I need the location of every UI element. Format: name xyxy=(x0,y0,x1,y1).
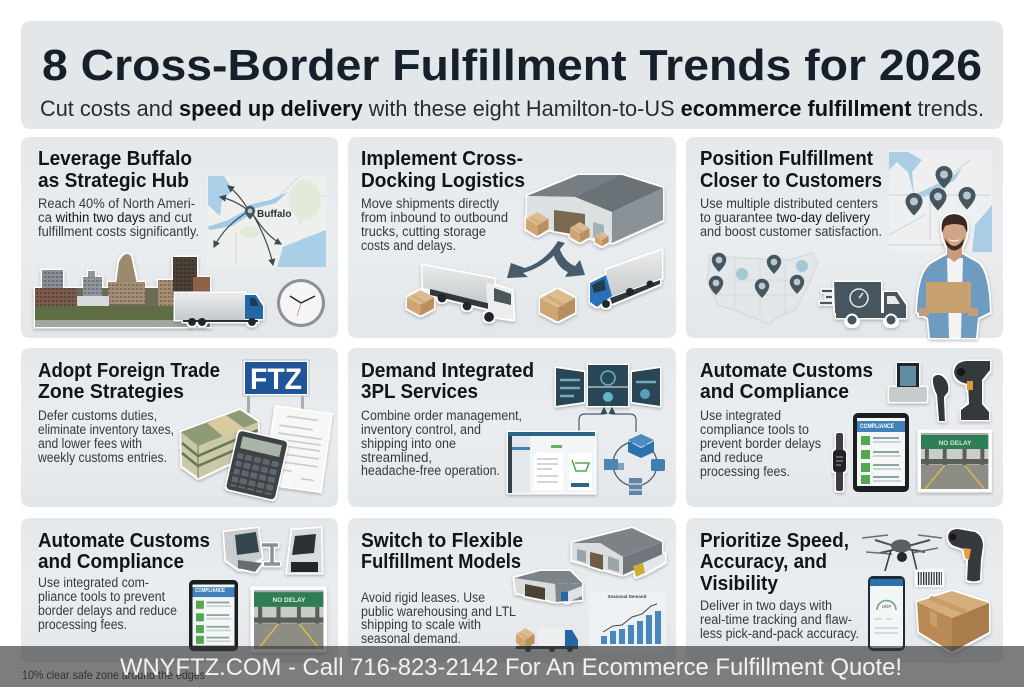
border crossing photo: NO DELAY xyxy=(272,597,306,604)
body text: and boost customer satisfaction. xyxy=(700,224,882,239)
body text: trucks, cutting storage xyxy=(361,224,486,239)
heading: Automate Customs xyxy=(700,360,873,382)
title: 8 Cross-Border Fulfillment Trends for 2026 xyxy=(42,41,982,90)
fulfillment cycle xyxy=(604,434,665,495)
FTZ sign: FTZ xyxy=(250,363,302,396)
passport reader xyxy=(287,528,322,573)
heading: Position Fulfillment xyxy=(700,148,873,170)
body text xyxy=(38,196,199,239)
drone xyxy=(862,535,942,571)
body text: border delays and reduce xyxy=(38,603,177,618)
body text xyxy=(37,408,174,465)
heading xyxy=(361,148,525,192)
safe zone note: 10% clear safe zone around the edges xyxy=(22,668,205,682)
border crossing photo xyxy=(919,431,990,491)
barcode scanner xyxy=(948,529,983,582)
heading: and Compliance xyxy=(38,551,184,573)
heading: Accuracy, and xyxy=(700,551,827,573)
heading: 3PL Services xyxy=(361,381,478,403)
customs computer xyxy=(224,528,280,572)
heading: Demand Integrated xyxy=(361,360,534,382)
blue truck xyxy=(590,250,662,308)
truck xyxy=(175,293,263,326)
compliance tablet: COMPLIANCE xyxy=(860,424,894,430)
dashboard monitors xyxy=(556,365,660,406)
map: regional pins xyxy=(889,150,992,252)
body text: Use multiple distributed centers xyxy=(700,196,878,211)
map: Buffalo routes: Buffalo xyxy=(257,209,291,220)
body text: shipping to scale with xyxy=(361,617,481,632)
panel: Switch to Flexible Fulfillment Models xyxy=(348,518,676,663)
footer banner xyxy=(0,646,1024,687)
body text: shipping into one xyxy=(361,436,456,451)
body text: pliance tools to prevent xyxy=(38,589,165,604)
body text: Use integrated com- xyxy=(38,575,149,590)
body text: weekly customs entries. xyxy=(37,450,167,465)
map: Buffalo routes xyxy=(207,176,326,267)
white truck with boxes xyxy=(407,265,514,322)
connector arrows xyxy=(579,408,636,432)
heading xyxy=(38,148,192,192)
body text: ca within two days and cut xyxy=(38,210,192,225)
heading: Switch to Flexible xyxy=(361,530,523,552)
heading xyxy=(700,360,873,403)
heading: Implement Cross- xyxy=(361,148,523,170)
body text: Defer customs duties, xyxy=(38,408,157,423)
body text: to guarantee two-day delivery xyxy=(700,210,870,225)
panel: Position Fulfillment Closer to Customers xyxy=(686,137,1003,338)
panel: Demand Integrated 3PL Services xyxy=(348,348,676,507)
panel: Automate Customs and Compliance (bottom) xyxy=(21,518,338,663)
body text: fulfillment costs significantly. xyxy=(38,224,199,239)
body text: and reduce xyxy=(700,450,763,465)
heading: Zone Strategies xyxy=(38,381,184,403)
warehouse xyxy=(526,175,663,246)
heading: Automate Customs xyxy=(38,530,210,552)
body text: Combine order management, xyxy=(361,408,522,423)
heading: Adopt Foreign Trade xyxy=(38,360,220,382)
panel: Prioritize Speed, Accuracy, and Visibility xyxy=(686,518,1003,663)
heading: Visibility xyxy=(700,573,779,595)
body text: Reach 40% of North Ameri- xyxy=(38,196,195,211)
tracking app phone xyxy=(868,576,905,651)
seasonal demand chart xyxy=(589,592,666,652)
heading xyxy=(38,360,220,403)
document xyxy=(265,406,331,492)
body text: costs and delays. xyxy=(361,238,456,253)
heading: Closer to Customers xyxy=(700,170,882,192)
body text xyxy=(700,408,821,479)
heading: and Compliance xyxy=(700,381,849,403)
body text: public warehousing and LTL xyxy=(361,604,516,619)
icon: clock xyxy=(277,279,325,327)
panel: Adopt Foreign Trade Zone Strategies xyxy=(21,348,338,507)
heading: Prioritize Speed, xyxy=(700,530,849,552)
heading: Docking Logistics xyxy=(361,170,525,192)
barcode label xyxy=(916,571,943,586)
body text: streamlined, xyxy=(361,450,432,465)
body text xyxy=(361,196,508,253)
barcode scanner gun xyxy=(954,361,990,420)
body text: processing fees. xyxy=(700,464,790,479)
body text xyxy=(361,408,522,478)
large warehouse xyxy=(572,528,665,577)
smart watch xyxy=(833,433,846,491)
border crossing photo xyxy=(252,588,325,651)
heading: Leverage Buffalo xyxy=(38,148,192,170)
handheld scanner xyxy=(933,375,948,421)
arrows: dock to trucks xyxy=(507,241,585,278)
body text: Avoid rigid leases. Use xyxy=(361,590,485,605)
heading xyxy=(361,530,523,573)
header panel xyxy=(21,21,1003,129)
body text: less pick-and-pack accuracy. xyxy=(700,626,859,641)
body text: compliance tools to xyxy=(700,422,809,437)
cardboard box xyxy=(540,289,575,322)
heading xyxy=(38,530,210,573)
compliance tablet xyxy=(189,580,238,651)
heading xyxy=(700,530,849,595)
tracking app phone: UGF xyxy=(882,604,892,609)
icon: fast delivery truck xyxy=(820,282,906,326)
body text xyxy=(700,598,859,641)
heading: Fulfillment Models xyxy=(361,551,521,573)
skyline xyxy=(35,254,210,327)
body text: Deliver in two days with xyxy=(700,598,832,613)
body text: processing fees. xyxy=(38,617,127,632)
body text: eliminate inventory taxes, xyxy=(38,422,174,437)
heading xyxy=(361,360,534,403)
border crossing photo: NO DELAY xyxy=(938,440,972,447)
body text: headache-free operation. xyxy=(361,463,500,478)
panel: Automate Customs and Compliance (top) xyxy=(686,348,1003,507)
panel: Implement Cross-Docking Logistics xyxy=(348,137,676,338)
truck with boxes xyxy=(516,628,578,652)
panel: Leverage Buffalo as Strategic Hub xyxy=(21,137,338,338)
body text: and lower fees with xyxy=(38,436,142,451)
body text: real-time tracking and flaw- xyxy=(700,612,852,627)
body text: seasonal demand. xyxy=(361,631,461,646)
body text xyxy=(38,575,177,632)
heading xyxy=(700,148,882,192)
cardboard box xyxy=(917,591,989,652)
small warehouse xyxy=(514,571,582,603)
body text: Move shipments directly xyxy=(361,196,499,211)
compliance tablet: COMPLIANCE xyxy=(195,588,225,594)
money stacks xyxy=(181,410,258,478)
heading: as Strategic Hub xyxy=(38,170,189,192)
body text: prevent border delays xyxy=(700,436,821,451)
FTZ sign xyxy=(243,360,309,413)
seasonal demand chart: Seasonal Demand xyxy=(608,594,647,599)
calculator xyxy=(226,430,288,500)
body text: Use integrated xyxy=(700,408,781,423)
subtitle: Cut costs and speed up delivery with these eight Hamilton-to-US ecommerce fulfillment trends. xyxy=(40,96,984,121)
card terminal xyxy=(889,363,927,402)
body text xyxy=(361,590,516,646)
body text: inventory control, and xyxy=(361,422,481,437)
order management screen xyxy=(508,432,595,493)
body text: from inbound to outbound xyxy=(361,210,508,225)
compliance tablet xyxy=(853,413,909,492)
banner text: WNYFTZ.COM - Call 716-823-2142 For An Ecommerce Fulfillment Quote! xyxy=(120,654,902,681)
map: US distribution centers xyxy=(707,253,818,325)
body text xyxy=(700,196,882,239)
person holding a parcel xyxy=(917,214,990,338)
